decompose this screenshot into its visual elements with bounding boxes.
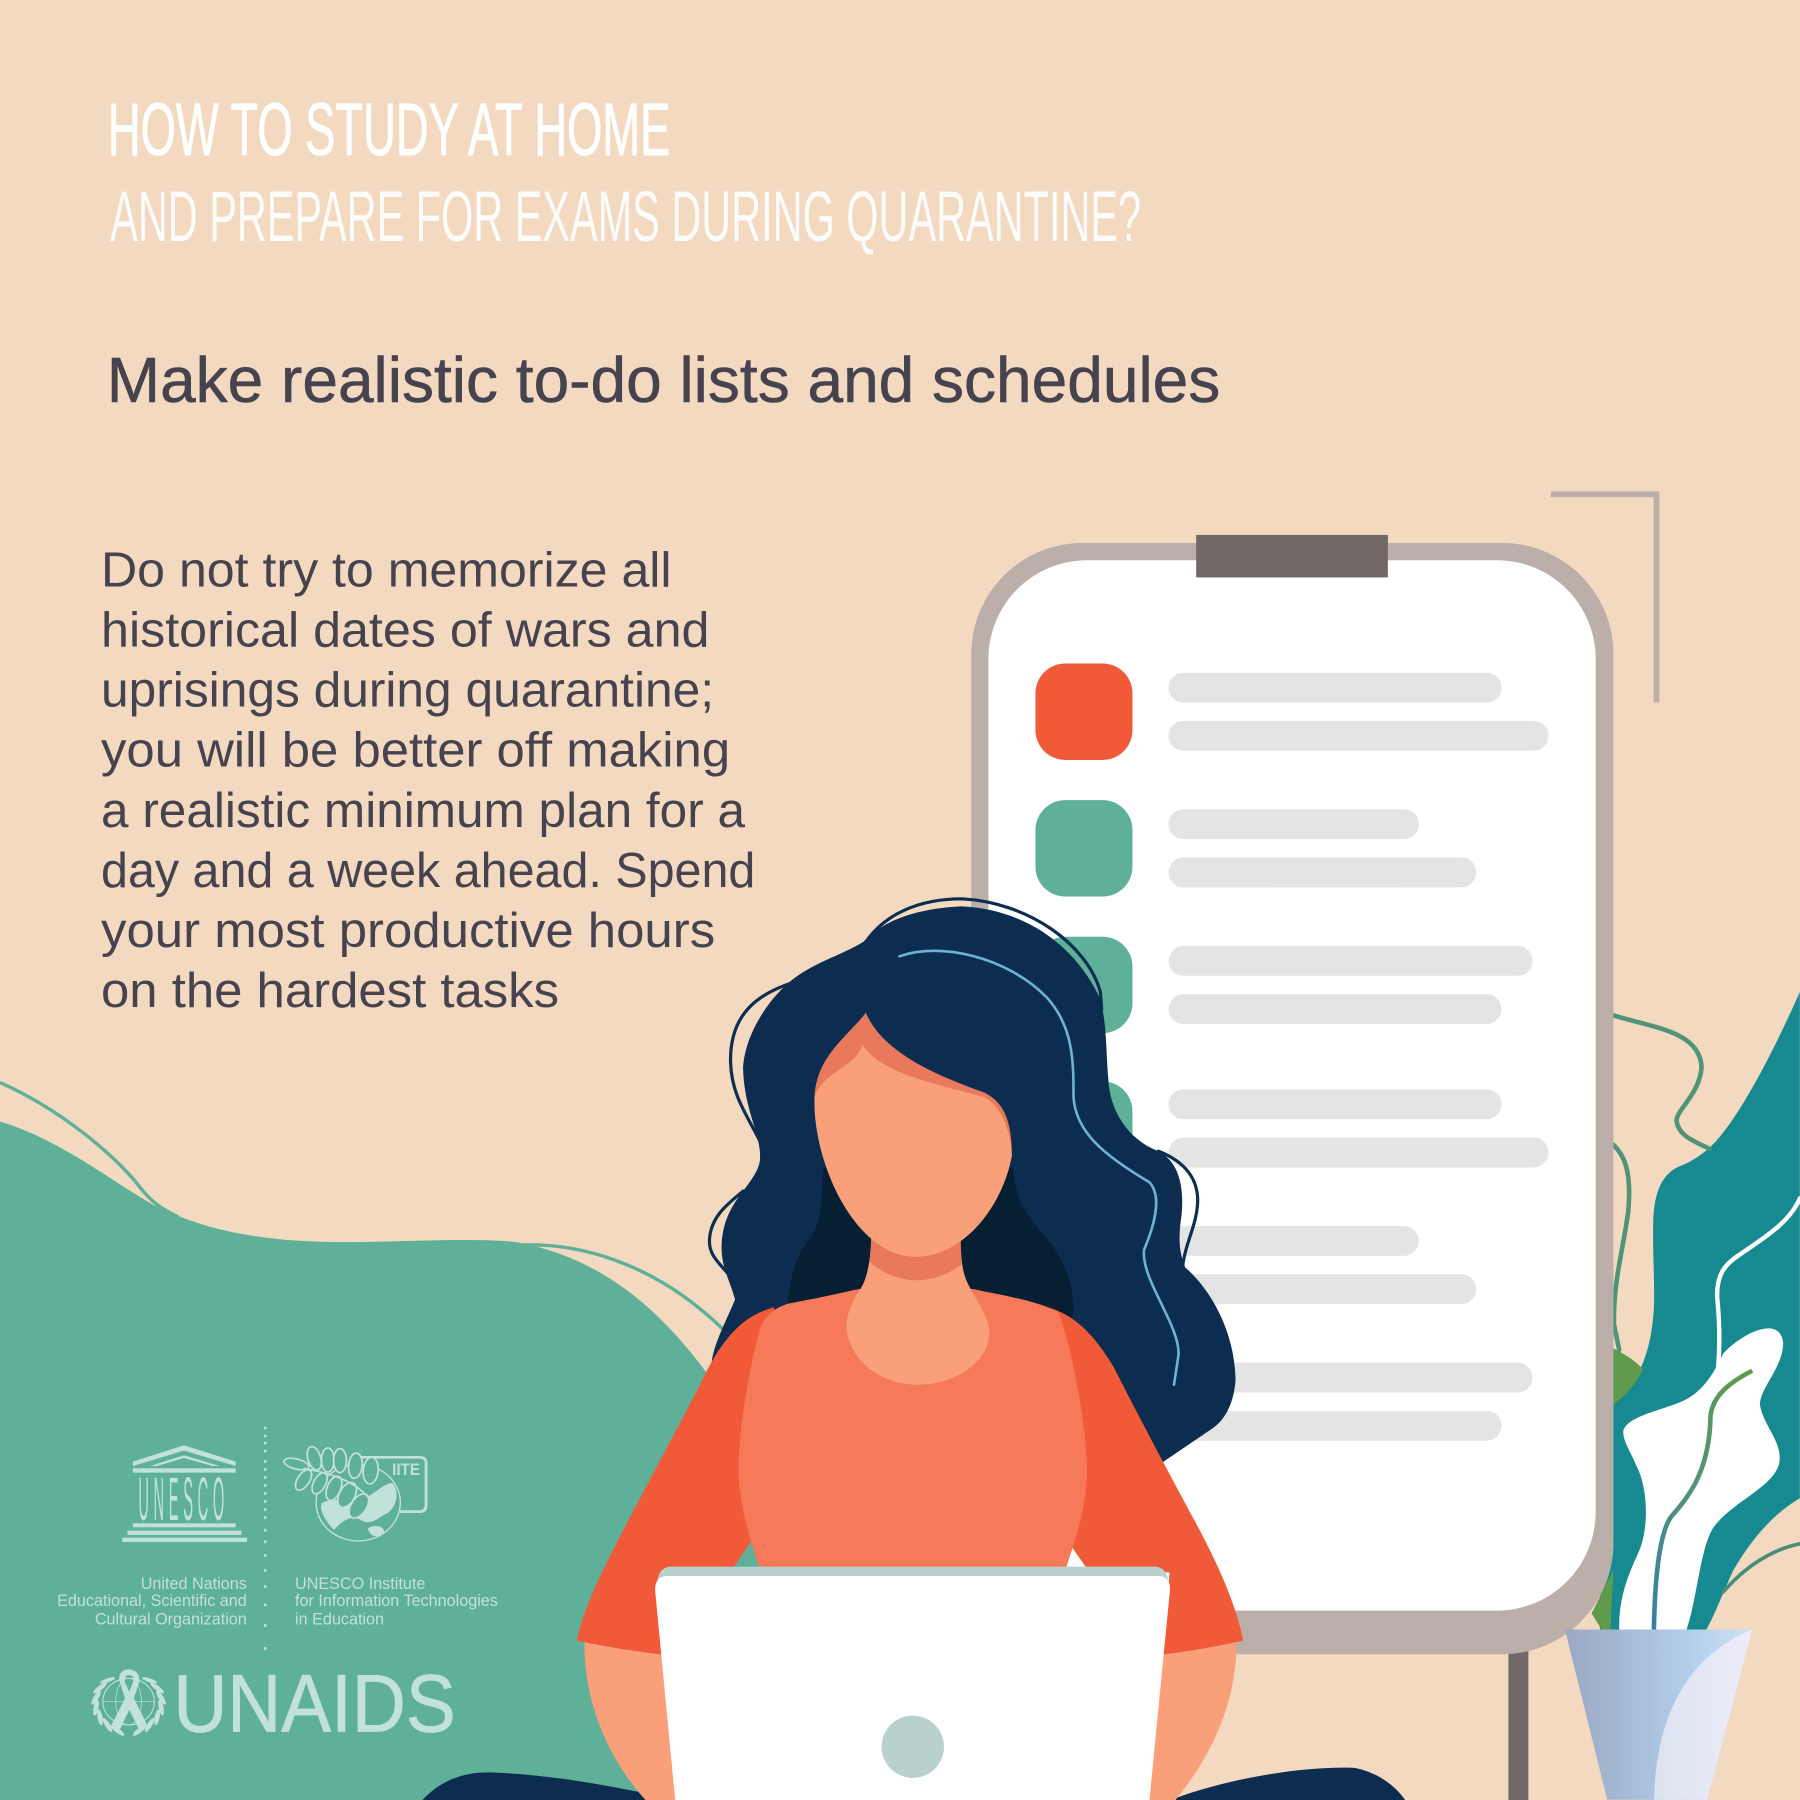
UNESCO caption: Cultural Organization xyxy=(95,1610,247,1628)
body text: historical dates of wars and xyxy=(101,604,709,658)
body text: on the hardest tasks xyxy=(101,964,559,1018)
green leaf lower xyxy=(1592,1571,1613,1629)
left leg xyxy=(422,1772,677,1800)
white leaf xyxy=(1619,1328,1783,1629)
clipboard paper xyxy=(988,560,1596,1611)
globe lines xyxy=(103,1678,154,1725)
blob outline right xyxy=(501,1245,723,1329)
checkbox 3 xyxy=(1035,937,1132,1033)
vine top xyxy=(1600,1011,1710,1149)
IITE caption: in Education xyxy=(295,1610,384,1628)
teal leaf xyxy=(1600,992,1800,1629)
shirt xyxy=(739,1289,1087,1572)
olive branch xyxy=(283,1445,379,1521)
corner bracket xyxy=(1551,494,1657,703)
laptop xyxy=(655,1567,1170,1800)
vine middle xyxy=(1607,1139,1629,1350)
right leg xyxy=(1171,1768,1405,1800)
white vein xyxy=(1717,1198,1800,1367)
IITE caption: for Information Technologies xyxy=(295,1592,498,1610)
vine lower xyxy=(1723,1544,1800,1592)
clipboard frame xyxy=(971,543,1613,1654)
hair highlight xyxy=(899,951,1179,1385)
IITE badge xyxy=(359,1457,426,1512)
hair outline left xyxy=(731,983,792,1155)
body text: uprisings during quarantine; xyxy=(101,664,714,718)
list bars xyxy=(1169,673,1549,1441)
UNAIDS emblem xyxy=(90,1669,168,1737)
forehead shadow xyxy=(815,1013,1012,1173)
IITE caption xyxy=(295,1575,498,1628)
body text: Do not try to memorize all xyxy=(101,544,672,598)
green background blob xyxy=(0,1122,781,1800)
hair outline right xyxy=(1158,1151,1198,1264)
checkbox 2 xyxy=(1035,800,1132,897)
continents xyxy=(321,1483,397,1530)
UNESCO caption: Educational, Scientific and xyxy=(57,1592,247,1610)
neck xyxy=(847,1232,990,1385)
clipboard clip xyxy=(1196,535,1388,577)
UNESCO caption xyxy=(57,1575,247,1628)
body text xyxy=(101,544,755,1018)
UNESCO caption: United Nations xyxy=(141,1575,247,1593)
right sleeve xyxy=(1051,1308,1243,1655)
vase xyxy=(1565,1629,1752,1800)
clipboard stand xyxy=(1508,1642,1528,1800)
vase body xyxy=(1565,1629,1752,1800)
left sleeve xyxy=(577,1307,774,1655)
IITE caption: UNESCO Institute xyxy=(295,1575,425,1593)
vase highlight xyxy=(1654,1629,1752,1800)
woman legs xyxy=(422,1768,1405,1800)
wreath left xyxy=(90,1676,126,1737)
checkbox 1 xyxy=(1035,664,1132,760)
body text: day and a week ahead. Spend xyxy=(101,844,755,898)
forearm left xyxy=(584,1637,677,1800)
dotted divider xyxy=(264,1427,267,1650)
globe xyxy=(316,1464,400,1541)
heading: Make realistic to-do lists and schedules xyxy=(107,344,1220,416)
forearm right xyxy=(1149,1637,1237,1800)
IITE logo xyxy=(283,1445,426,1541)
hair outline lower left xyxy=(709,1191,743,1290)
ribbon xyxy=(111,1669,147,1730)
body text: your most productive hours xyxy=(101,904,715,958)
blob outline left xyxy=(0,1083,178,1217)
woman xyxy=(577,899,1243,1800)
hair outline top xyxy=(868,899,1102,1009)
IITE label: IITE xyxy=(392,1460,420,1479)
body text: you will be better off making xyxy=(101,724,730,778)
UNESCO logo: UNESCO xyxy=(138,1466,229,1534)
plant xyxy=(1592,992,1800,1629)
leaf stem xyxy=(1654,1371,1752,1629)
body text: a realistic minimum plan for a xyxy=(101,784,746,838)
UNAIDS wordmark: UNAIDS xyxy=(173,1659,456,1750)
UNESCO logo xyxy=(122,1445,247,1542)
laptop rim xyxy=(657,1567,1168,1581)
face xyxy=(814,1044,1012,1257)
neck shadow xyxy=(869,1232,962,1280)
title line 1: HOW TO STUDY AT HOME xyxy=(108,87,670,171)
wreath right xyxy=(131,1676,168,1737)
hair xyxy=(712,906,1236,1462)
shadowed under-hair xyxy=(788,1168,1073,1317)
clipboard xyxy=(971,535,1613,1654)
logos xyxy=(57,1427,498,1750)
green leaf upper xyxy=(1600,1340,1643,1410)
checkbox 4 xyxy=(1035,1081,1132,1178)
laptop logo xyxy=(881,1716,944,1778)
laptop lid xyxy=(655,1576,1170,1800)
